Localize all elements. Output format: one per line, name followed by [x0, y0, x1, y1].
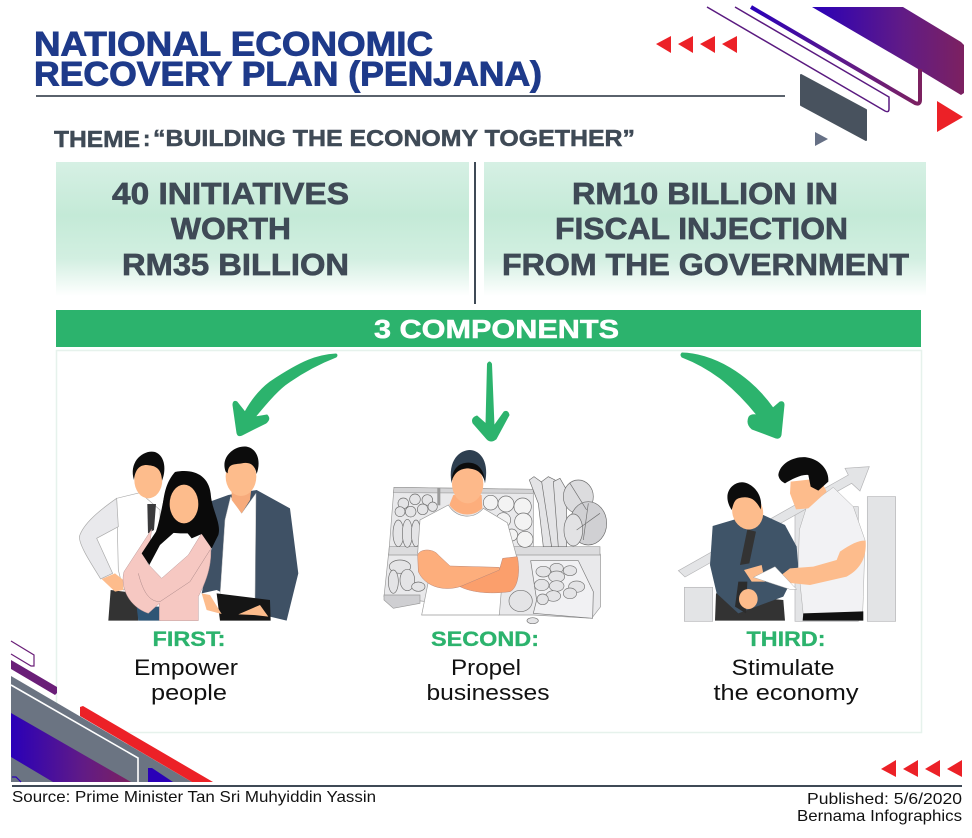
- panel divider: [474, 162, 476, 304]
- panel: RM10 billion fiscal injection: FISCAL INJECTION: [555, 211, 848, 246]
- panel: 40 initiatives: [56, 162, 469, 296]
- source: Source: Prime Minister Tan Sri Muhyiddin Yassin: [12, 789, 376, 806]
- component labels: first: people: [151, 680, 227, 705]
- title: [34, 26, 542, 94]
- theme line: :: [143, 126, 150, 151]
- illustration: three business people: [79, 447, 298, 621]
- trader: [418, 450, 519, 615]
- component labels: first: [134, 628, 238, 705]
- component labels: first: FIRST:: [152, 628, 226, 651]
- component labels: third: [714, 628, 858, 705]
- arrow: right: [681, 353, 784, 438]
- component labels: third: Stimulate: [732, 655, 834, 680]
- illustration: two men with growth chart: [678, 457, 896, 621]
- left man: [710, 482, 798, 621]
- header rule: [36, 95, 785, 97]
- panel: RM10 billion fiscal injection: FROM THE GOVERNMENT: [502, 247, 909, 282]
- arrow: left: [233, 354, 337, 436]
- panel: RM10 billion fiscal injection: [484, 162, 926, 296]
- component labels: third: the economy: [714, 680, 858, 705]
- published credit: [797, 791, 962, 825]
- panel: 40 initiatives: 40 INITIATIVES: [112, 176, 349, 211]
- published credit: Published: 5/6/2020: [807, 791, 962, 808]
- component labels: first: Empower: [134, 655, 238, 680]
- published credit: Bernama Infographics: [797, 808, 962, 825]
- component labels: second: businesses: [426, 680, 550, 705]
- front man: [202, 447, 298, 621]
- stall: [384, 487, 601, 618]
- theme line: THEME: [54, 126, 140, 152]
- components banner: 3 COMPONENTS: [374, 314, 619, 344]
- illustration: trader at vegetable stall: [384, 450, 607, 624]
- crate with potatoes: [509, 561, 593, 624]
- bottom left decoration: [11, 641, 213, 782]
- component labels: third: THIRD:: [746, 628, 826, 651]
- right man: [753, 457, 866, 621]
- top right decoration: [707, 7, 964, 146]
- top red arrows: [656, 36, 737, 53]
- title: RECOVERY PLAN (PENJANA): [34, 56, 542, 94]
- component labels: second: [426, 628, 550, 705]
- title: NATIONAL ECONOMIC: [34, 26, 433, 64]
- panel: 40 initiatives: WORTH: [171, 211, 291, 246]
- components banner: [56, 310, 921, 347]
- bottom red arrows: [881, 760, 962, 777]
- panel: 40 initiatives: RM35 BILLION: [122, 247, 349, 282]
- component labels: second: Propel: [451, 655, 521, 680]
- components panel frame: [56, 350, 922, 732]
- theme line: “BUILDING THE ECONOMY TOGETHER”: [153, 125, 635, 151]
- panel: RM10 billion fiscal injection: RM10 BILLION IN: [572, 176, 838, 211]
- woman: [123, 471, 219, 621]
- vegetables: [388, 477, 607, 593]
- growth chart: [678, 467, 896, 621]
- back man: [79, 452, 164, 621]
- component labels: second: SECOND:: [431, 628, 539, 651]
- arrow: middle: [472, 362, 509, 441]
- footer rule: [12, 785, 962, 787]
